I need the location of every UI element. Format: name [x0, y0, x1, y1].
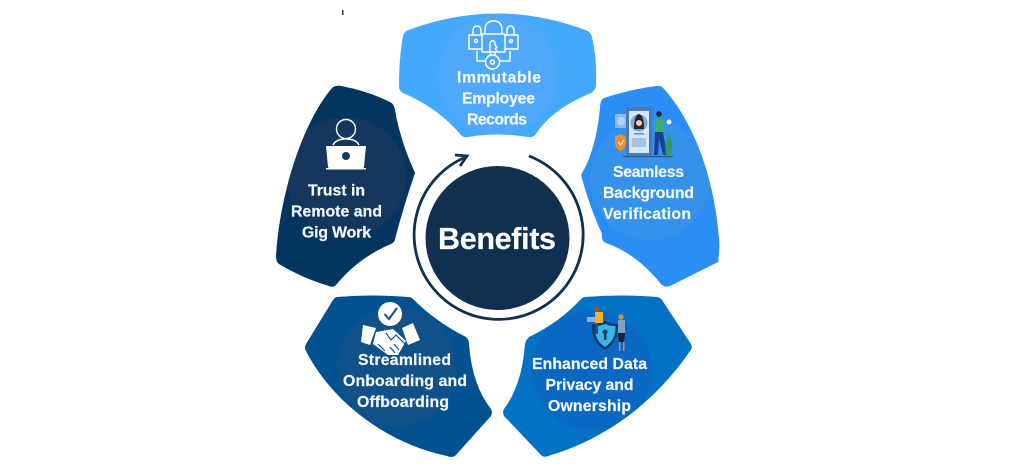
panel: Trust in Remote and Gig Work: [276, 86, 415, 287]
label: Remote and: [291, 204, 382, 220]
circular arrow ring: [414, 155, 583, 319]
label: [343, 352, 467, 411]
label: Background: [603, 185, 694, 202]
label: [603, 164, 694, 223]
panel: Enhanced Data Privacy and Ownership: [503, 296, 692, 457]
label: Offboarding: [357, 394, 449, 411]
label: Immutable: [457, 70, 541, 86]
center title: Benefits: [438, 222, 556, 256]
panel: Seamless Background Verification: [581, 86, 719, 287]
label: Employee: [462, 90, 535, 108]
icon: shield with people: [587, 306, 625, 351]
label: Records: [467, 112, 527, 128]
label: [291, 182, 382, 242]
stray mark: [342, 10, 344, 15]
label: Streamlined: [358, 352, 451, 369]
label: Gig Work: [302, 224, 371, 242]
icon: padlocks and key: [469, 21, 518, 69]
icon: phone profile illustration: [615, 107, 673, 157]
label: Ownership: [548, 398, 631, 415]
icon: remote worker with laptop: [326, 120, 366, 170]
panel: Immutable Employee Records: [399, 14, 596, 137]
panel: Streamlined Onboarding and Offboarding: [305, 296, 492, 457]
label: Verification: [603, 206, 691, 223]
label: [532, 356, 647, 415]
label: Trust in: [308, 182, 365, 200]
label: Enhanced Data: [532, 356, 647, 373]
label: [457, 70, 541, 128]
center circle: [426, 166, 570, 310]
label: Privacy and: [546, 377, 634, 394]
icon: handshake and check: [361, 302, 420, 355]
label: Onboarding and: [343, 373, 467, 390]
label: Seamless: [613, 164, 684, 181]
